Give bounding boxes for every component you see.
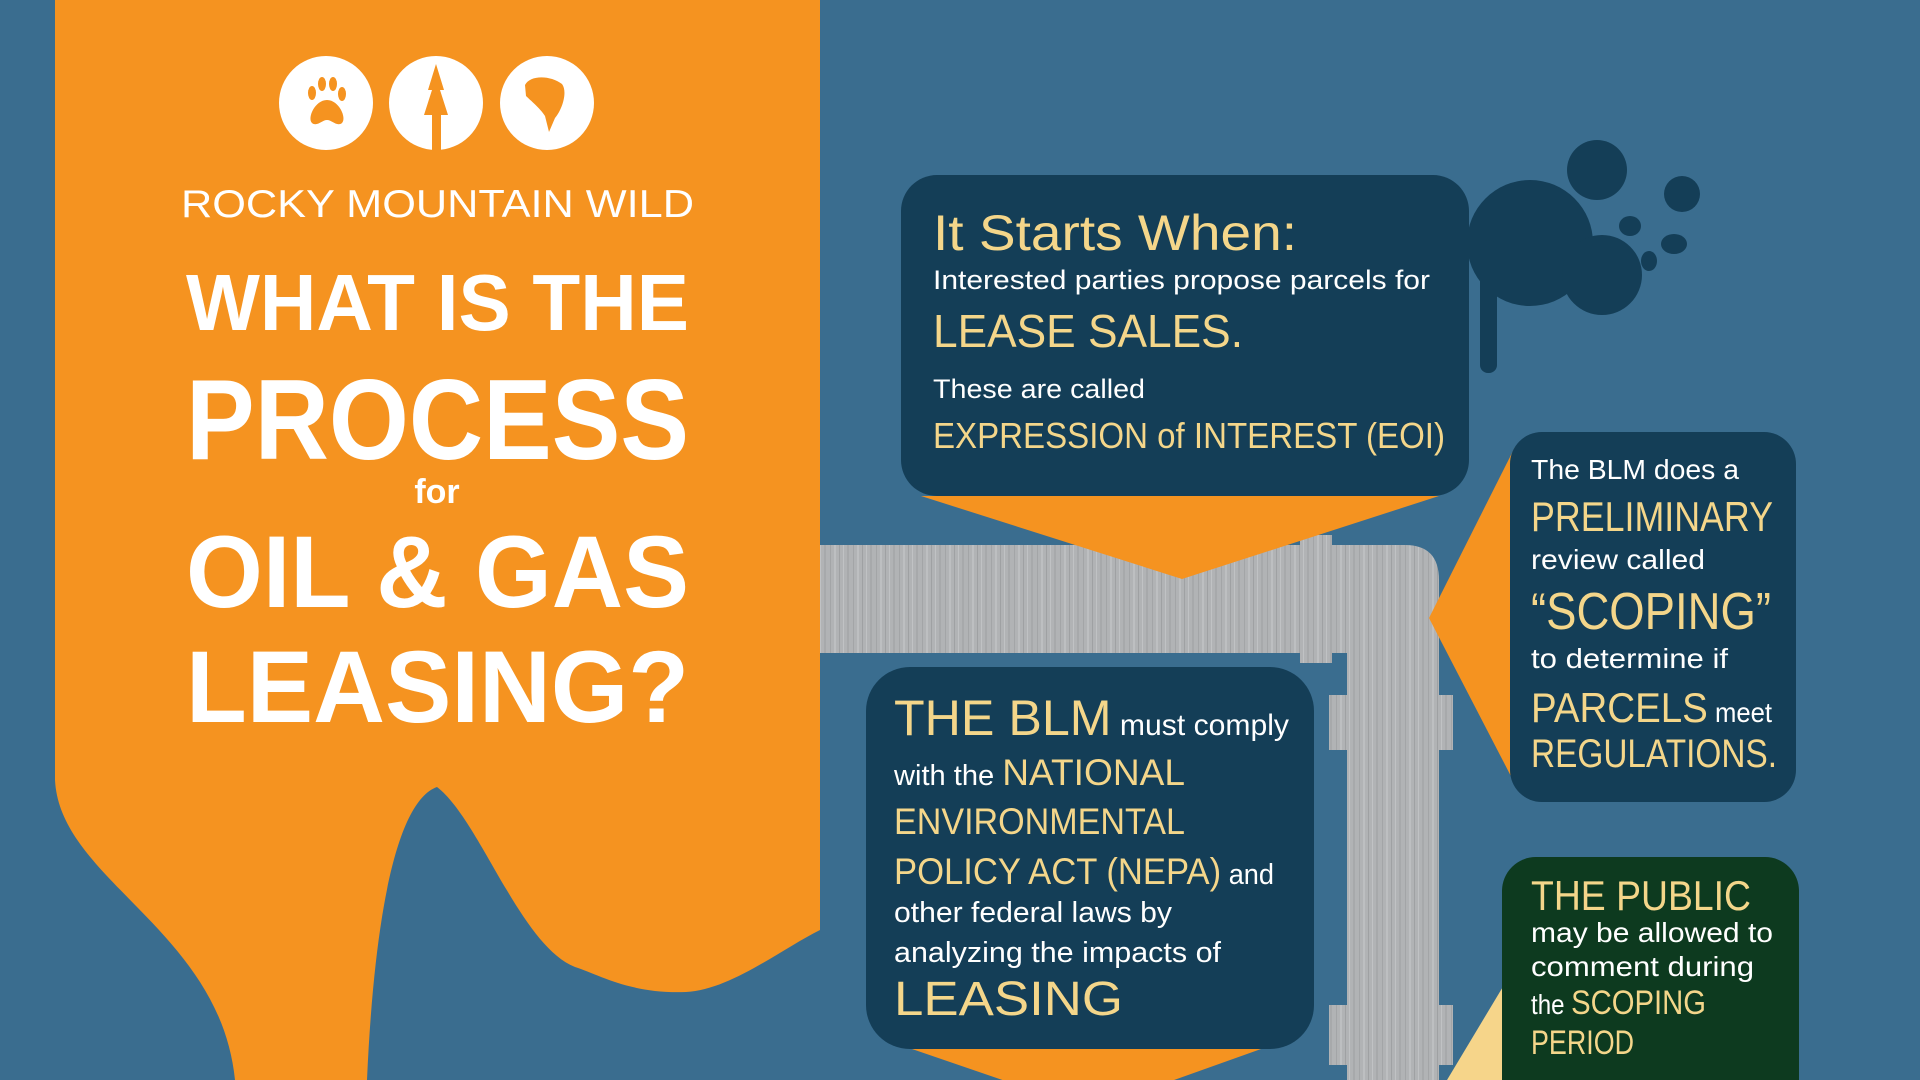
icon: paw	[279, 56, 373, 150]
panel: blm nepa: analyzing the impacts of	[894, 937, 1222, 969]
panel: it starts when: These are called	[933, 374, 1145, 404]
panel: blm nepa: with the NATIONAL	[893, 752, 1185, 793]
panel: the public: may be allowed to	[1531, 917, 1773, 948]
panel: scoping: PARCELS meet	[1531, 684, 1772, 731]
icons: three circles	[279, 56, 594, 150]
panel: the public: comment during	[1531, 951, 1754, 982]
arrow: light yellow to public	[1447, 980, 1507, 1080]
panel: blm nepa: other federal laws by	[894, 897, 1173, 929]
icon: fish	[500, 56, 594, 150]
panel: the public: PERIOD	[1531, 1024, 1634, 1062]
panel: scoping: The BLM does a	[1531, 454, 1739, 485]
title: PROCESS	[186, 357, 689, 484]
panel: scoping: “SCOPING”	[1531, 583, 1771, 641]
panel: blm nepa: THE BLM must comply	[894, 690, 1289, 746]
panel: scoping: PRELIMINARY	[1531, 493, 1773, 540]
panel: scoping: REGULATIONS.	[1531, 732, 1777, 776]
panel: the public: THE PUBLIC	[1531, 872, 1751, 919]
title: OIL & GAS	[186, 515, 689, 629]
orange title panel	[55, 0, 820, 1080]
panel: blm nepa: POLICY ACT (NEPA) and	[894, 851, 1274, 892]
arrow: orange down from box1	[921, 496, 1439, 579]
panel: scoping	[1510, 432, 1796, 802]
panel: it starts when: LEASE SALES.	[933, 305, 1243, 357]
panel: blm nepa: ENVIRONMENTAL	[894, 801, 1185, 842]
oil blob splash	[1467, 140, 1700, 373]
panel: scoping: review called	[1531, 544, 1705, 575]
panel: scoping: to determine if	[1531, 643, 1728, 674]
panel: it starts when: Interested parties propose parcels for	[933, 265, 1430, 295]
title: WHAT IS THE	[186, 258, 689, 347]
panel: the public: the SCOPING	[1531, 984, 1706, 1022]
title: for	[414, 473, 460, 511]
panel: blm nepa	[866, 667, 1314, 1049]
arrow: orange down from blm	[912, 1049, 1261, 1080]
arrow: orange pointing left to scoping	[1429, 447, 1515, 784]
panel: the public	[1502, 857, 1799, 1080]
icon: tree	[389, 56, 483, 150]
pipe	[820, 535, 1453, 1080]
title: LEASING?	[186, 630, 689, 744]
org name: ROCKY MOUNTAIN WILD	[181, 183, 694, 226]
panel: it starts when: It Starts When:	[933, 205, 1297, 261]
panel: it starts when: EXPRESSION of INTEREST (EOI)	[933, 415, 1445, 456]
title	[186, 258, 689, 744]
panel: it starts when	[901, 175, 1469, 496]
panel: blm nepa: LEASING	[894, 973, 1123, 1026]
